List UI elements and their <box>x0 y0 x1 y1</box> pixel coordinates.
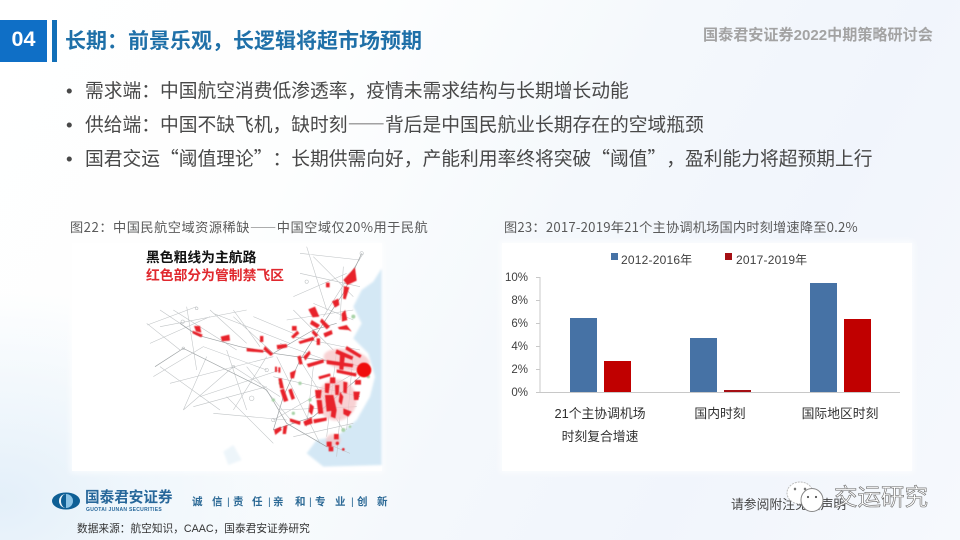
company slogan: 专 <box>315 496 326 508</box>
figure 23 caption: 图23：2017-2019年21个主协调机场国内时刻增速降至0.2% <box>504 217 858 236</box>
y axis labels: 2% <box>511 364 528 376</box>
green dots <box>272 315 370 432</box>
company slogan: 诚 <box>192 496 202 508</box>
bullet: threshold theory: 国君交运“阈值理论”：长期供需向好，产能利用率终将突破“阈值”，盈利能力将超预期上行 <box>85 144 872 171</box>
bullet list <box>66 80 872 171</box>
pink haze behind dense zones <box>317 345 371 446</box>
legend: no-fly zones: 红色部分为管制禁飞区 <box>146 268 284 283</box>
sea <box>307 268 382 467</box>
title accent bar <box>52 20 57 62</box>
title: 长期：前景乐观，长逻辑将超市场预期 <box>65 30 422 53</box>
y axis labels <box>505 272 528 399</box>
y axis labels: 4% <box>511 341 528 353</box>
legend: 2017-2019年 <box>736 253 807 267</box>
category labels: 时刻复合增速 <box>562 429 639 444</box>
company slogan: 和 <box>295 496 306 508</box>
watermark text: 交运研究 <box>834 484 928 510</box>
category labels: 国内时刻 <box>694 406 746 421</box>
bullet: demand: • <box>66 80 73 101</box>
y axis labels: 6% <box>511 318 528 330</box>
main air routes <box>155 253 367 447</box>
company slogan <box>192 496 388 508</box>
icon: wechat watermark <box>786 482 824 512</box>
bars: domestic slots <box>690 338 751 392</box>
panel: airspace map <box>72 243 382 471</box>
figure 22 caption: 图22：中国民航空域资源稀缺——中国空域仅20%用于民航 <box>70 217 428 236</box>
section number badge <box>0 20 47 62</box>
panel: bar chart <box>502 243 912 471</box>
y axis labels: 8% <box>511 295 528 307</box>
data source: 数据来源：航空知识，CAAC，国泰君安证券研究 <box>77 523 310 535</box>
company slogan: 信 <box>212 496 222 508</box>
company slogan: 责 <box>233 496 244 508</box>
category labels <box>554 406 878 444</box>
legend: main routes: 黑色粗线为主航路 <box>146 250 256 265</box>
bars: 21 airports <box>570 318 631 392</box>
legend <box>611 253 807 267</box>
map legend <box>146 250 284 283</box>
restricted areas <box>193 267 371 451</box>
company slogan: 业 <box>335 496 346 508</box>
bars: international slots <box>810 283 871 392</box>
legend: 2012-2016年 <box>621 253 692 267</box>
axis <box>536 278 900 392</box>
bullet: threshold theory: • <box>66 148 73 169</box>
gulf inlet <box>223 445 242 465</box>
company slogan: 创 <box>357 496 368 508</box>
company slogan: 亲 <box>273 496 284 508</box>
footer logo <box>52 489 388 513</box>
y axis labels: 10% <box>505 272 528 284</box>
company slogan: | <box>309 496 312 508</box>
logo Chinese name: 国泰君安证券 <box>85 490 173 506</box>
bullet: supply: • <box>66 114 73 135</box>
category labels: 国际地区时刻 <box>802 406 878 421</box>
disclaimer note: 请参阅附注免责声明 <box>731 497 846 512</box>
section number badge: 04 <box>12 27 35 51</box>
bullet: supply: 供给端：中国不缺飞机，缺时刻——背后是中国民航业长期存在的空域瓶颈 <box>85 110 704 137</box>
company slogan: | <box>351 496 354 508</box>
logo icon <box>52 492 80 510</box>
navigation points <box>181 252 363 422</box>
company slogan: | <box>268 496 271 508</box>
conference name: 国泰君安证券2022中期策略研讨会 <box>703 27 933 44</box>
y axis labels: 0% <box>511 387 528 399</box>
company slogan: | <box>227 496 230 508</box>
bullet: demand: 需求端：中国航空消费低渗透率，疫情未需求结构与长期增长动能 <box>85 80 629 101</box>
company slogan: 任 <box>252 496 262 508</box>
category labels: 21个主协调机场 <box>554 406 646 421</box>
company slogan: 新 <box>377 496 388 508</box>
thin air routes <box>147 247 363 457</box>
logo English name: GUOTAI JUNAN SECURITIES <box>86 507 162 513</box>
